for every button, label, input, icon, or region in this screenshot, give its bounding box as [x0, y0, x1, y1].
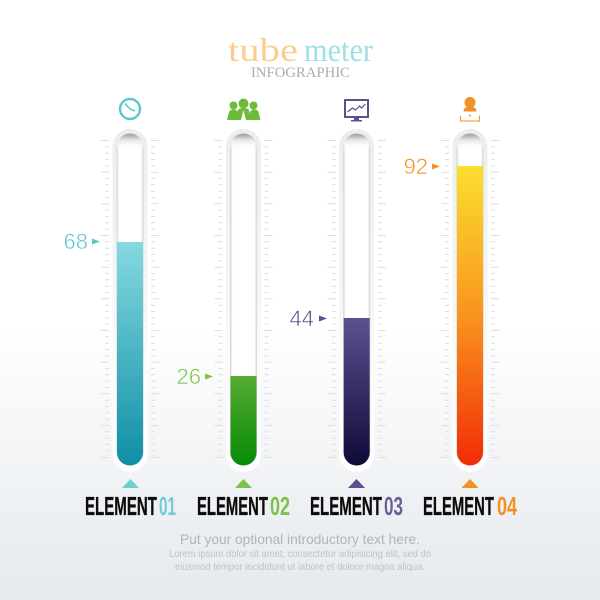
title: tube: [228, 33, 298, 69]
value 44: 44: [290, 306, 314, 331]
value 44: [290, 306, 327, 331]
intro text: [169, 531, 431, 573]
tube 1: [101, 129, 159, 472]
label: element 04: 04: [497, 491, 517, 521]
intro text: eiusmod tempor incididunt ut labore et dolore magna aliqua.: [175, 561, 425, 573]
fill level 3: [344, 318, 370, 466]
title: INFOGRAPHIC: [251, 65, 350, 81]
value 68: [64, 229, 100, 254]
icon: clock: [120, 99, 140, 119]
label: element 01: 01: [159, 491, 176, 521]
fill level 4: [457, 166, 483, 466]
tube 2: [214, 129, 272, 472]
title: [228, 33, 373, 81]
marker triangles: [122, 479, 478, 488]
icon: team: [227, 98, 260, 120]
icon: monitor chart: [345, 100, 368, 122]
value 26: [177, 364, 213, 389]
value 68: 68: [64, 229, 88, 254]
tube 4: [441, 129, 499, 472]
icon: person at laptop: [460, 97, 480, 121]
fill level 2: [230, 376, 256, 466]
title: meter: [304, 33, 373, 69]
label: element 03: ELEMENT: [310, 491, 382, 521]
label: element 02: ELEMENT: [197, 491, 268, 521]
label: element 03: 03: [384, 491, 403, 521]
value 92: [404, 154, 440, 179]
label: element 01: ELEMENT: [85, 491, 157, 521]
label: element 04: ELEMENT: [423, 491, 494, 521]
value 92: 92: [404, 154, 428, 179]
intro text: Put your optional introductory text here.: [180, 531, 420, 547]
tube 3: [328, 129, 386, 472]
label: element 02: 02: [270, 491, 290, 521]
fill level 1: [117, 242, 143, 466]
intro text: Lorem ipsum dolor sit amet, consectetur adipisicing elit, sed do: [169, 548, 431, 560]
value 26: 26: [177, 364, 201, 389]
